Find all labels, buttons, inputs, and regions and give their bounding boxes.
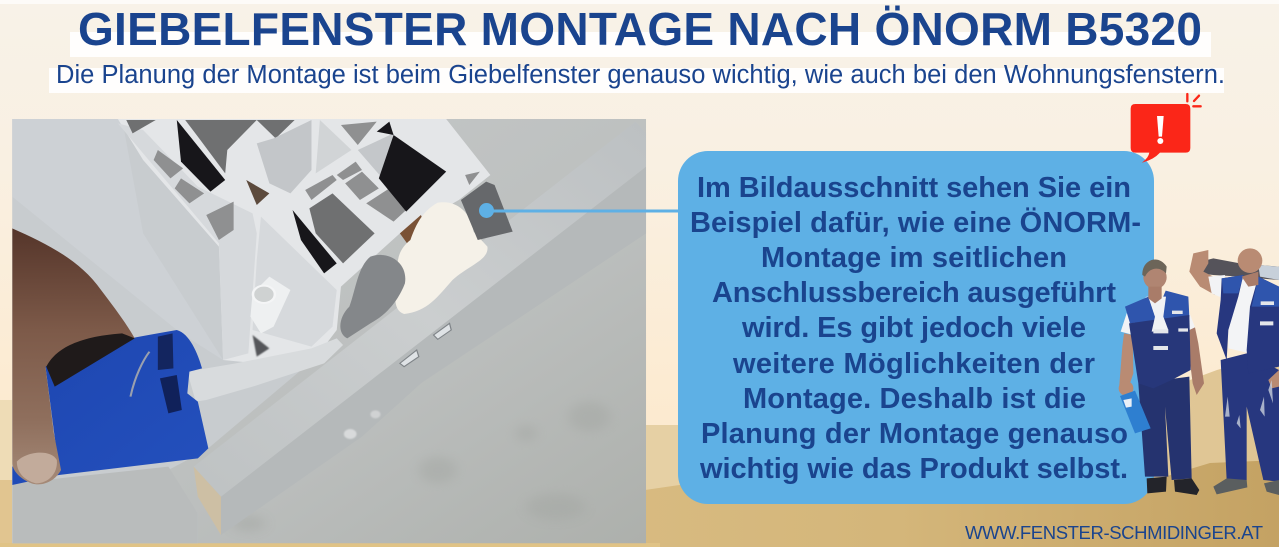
photo: window profile installation	[12, 119, 646, 543]
bubble text: weitere Möglichkeiten der	[732, 348, 1095, 380]
worker left	[1119, 259, 1204, 495]
subtitle: Die Planung der Montage ist beim Giebelfenster genauso wichtig, wie auch bei den Wohnungsfenstern.	[56, 61, 1225, 89]
bubble text: wichtig wie das Produkt selbst.	[699, 453, 1128, 485]
workers	[1119, 248, 1279, 495]
window profile body	[118, 119, 490, 363]
website url: WWW.FENSTER-SCHMIDINGER.AT	[965, 522, 1263, 543]
speech bubble panel	[678, 151, 1154, 504]
cable	[187, 338, 343, 402]
grey seal round	[340, 255, 405, 338]
bubble text: wird. Es gibt jedoch viele	[741, 312, 1086, 344]
hand	[12, 228, 135, 484]
sill screws	[400, 323, 451, 367]
bubble text: Anschlussbereich ausgeführt	[712, 277, 1116, 309]
foam	[395, 202, 488, 314]
dark glazing	[177, 120, 446, 273]
connector line with dot	[479, 203, 678, 218]
bubble text: Im Bildausschnitt sehen Sie ein	[697, 172, 1131, 204]
blue handle	[12, 330, 208, 485]
roll	[1193, 258, 1279, 280]
wall reveal left	[12, 179, 299, 544]
sill underside	[430, 195, 610, 334]
profile chambers	[154, 122, 480, 240]
worker right	[1189, 248, 1279, 495]
grey seal square	[461, 182, 513, 240]
thumbnail	[17, 453, 57, 483]
sill top	[258, 203, 598, 462]
hinge	[250, 277, 290, 333]
title: GIEBELFENSTER MONTAGE NACH ÖNORM B5320	[78, 3, 1202, 55]
bubble text: Montage. Deshalb ist die	[743, 383, 1086, 415]
bubble text: Planung der Montage genauso	[701, 418, 1128, 450]
icon: alert speech bubble	[1131, 94, 1201, 163]
product box	[1120, 391, 1151, 433]
dark shadow under frame	[253, 335, 269, 357]
floor mottling	[238, 408, 600, 529]
arm	[1189, 250, 1215, 295]
bubble text: Montage im seitlichen	[761, 242, 1067, 274]
bubble text	[690, 172, 1141, 485]
title block	[49, 3, 1225, 93]
sill end face	[194, 467, 221, 535]
bubble text: Beispiel dafür, wie eine ÖNORM-	[690, 206, 1141, 239]
